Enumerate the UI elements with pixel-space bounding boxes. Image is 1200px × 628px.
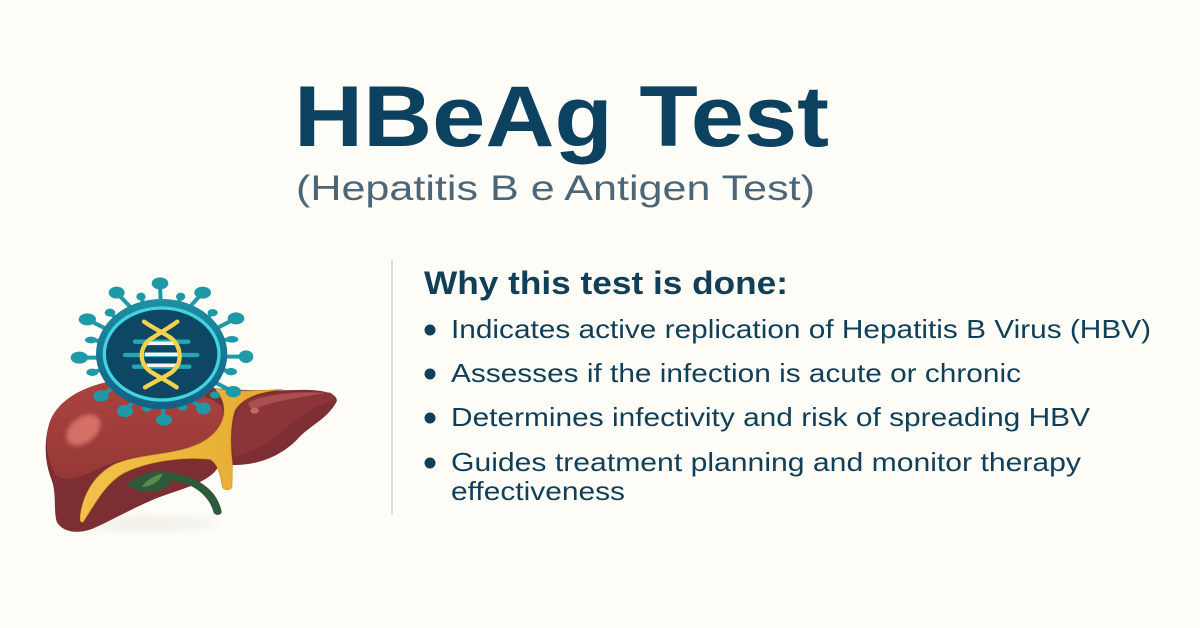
- subtitle: (Hepatitis B e Antigen Test): [296, 169, 815, 208]
- illustration: liver with virus: [46, 277, 337, 532]
- gallbladder and duct: [127, 471, 222, 515]
- virus: [71, 277, 253, 426]
- liver body: [46, 381, 337, 532]
- bullet list: [424, 314, 1151, 506]
- bullet 4: Guides treatment planning and monitor therapy: [451, 447, 1081, 477]
- DNA rungs: [125, 342, 197, 367]
- bullet 1: Indicates active replication of Hepatitis B Virus (HBV): [451, 314, 1151, 344]
- heading: why this test is done: Why this test is done:: [424, 265, 788, 301]
- bullet 2: Assesses if the infection is acute or chronic: [451, 358, 1021, 388]
- DNA helix: [142, 322, 180, 387]
- bullet 4: effectiveness: [451, 476, 625, 506]
- title: HBeAg Test: [294, 69, 829, 165]
- bullet 3: Determines infectivity and risk of spreading HBV: [451, 402, 1091, 432]
- virus capsid: [96, 299, 227, 409]
- yellow ligament: [80, 388, 283, 522]
- liver shadow: [70, 516, 217, 531]
- bullet 4: [424, 447, 1081, 506]
- vertical divider: [391, 260, 393, 515]
- virus spikes: [71, 277, 253, 426]
